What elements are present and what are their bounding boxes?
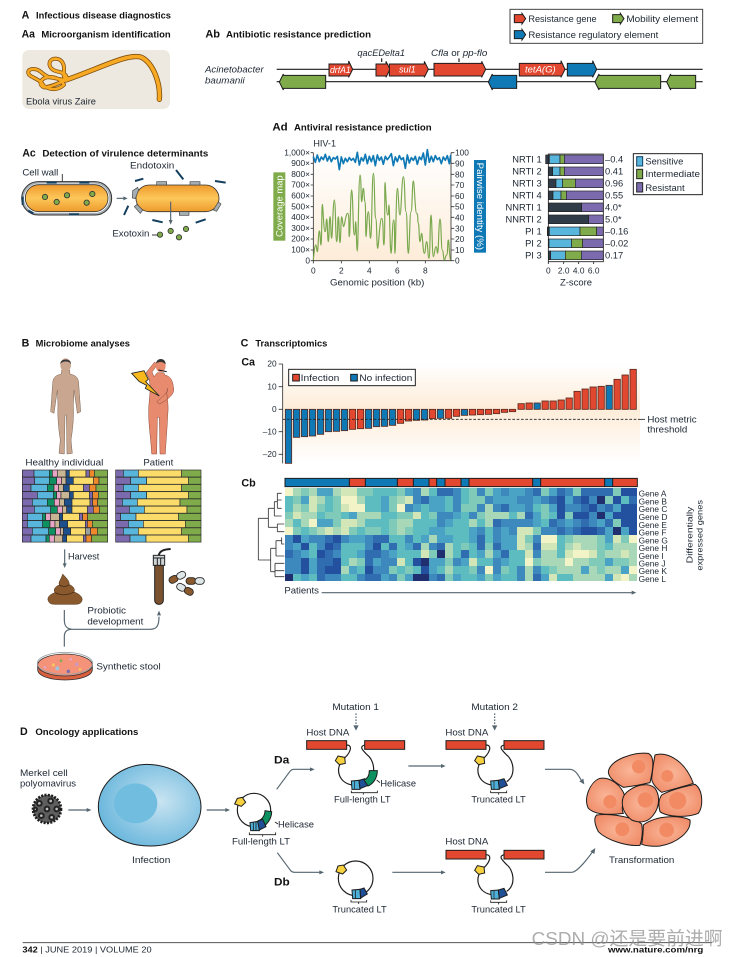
harvest arrow: Harvest xyxy=(68,552,100,562)
score values: 5.0* xyxy=(605,215,622,225)
score values: 0.41 xyxy=(605,167,623,177)
y axis: 10 xyxy=(267,381,277,391)
heading C: Transcriptomics xyxy=(255,339,327,349)
left axis labels: 1,000× xyxy=(284,147,310,157)
panel: C transcriptomics xyxy=(241,338,705,595)
gene labels above: qacEDelta1 xyxy=(357,48,405,58)
labels healthy individual and patient: Healthy individual xyxy=(25,458,103,468)
score values: –0.02 xyxy=(605,239,628,249)
watermark: CSDN @还是要前进啊 xyxy=(532,928,723,949)
gene labels: Gene E xyxy=(639,520,667,530)
differentially expressed genes label xyxy=(685,500,705,571)
mutation 2 label and arrow xyxy=(471,702,518,731)
left axis labels: 0 xyxy=(305,255,310,265)
heading Ad: Antiviral resistance prediction xyxy=(294,123,432,133)
gene labels: Gene K xyxy=(639,566,667,576)
drug class labels: PI 1 xyxy=(525,227,542,237)
truncated LT label top: Truncated LT xyxy=(471,795,526,805)
legend: resistance categories: Intermediate xyxy=(645,169,700,179)
gene names in arrows: drfA1 xyxy=(330,65,351,75)
gene arrows xyxy=(279,61,696,90)
label Ebola virus Zaire: Ebola virus Zaire xyxy=(26,96,96,106)
gene names in arrows: tetA(G) xyxy=(525,64,556,74)
legend: gene types xyxy=(510,9,703,43)
z-score axis labels xyxy=(546,265,600,275)
label transformation: Transformation xyxy=(609,855,674,865)
drug class labels: PI 2 xyxy=(525,239,542,249)
threshold line and label: threshold xyxy=(647,425,687,435)
icon: patient xyxy=(146,359,174,454)
label infection: Infection xyxy=(132,855,170,865)
labels helicase and full-length LT Da: Helicase xyxy=(380,779,416,789)
label Merkel cell polyomavirus xyxy=(20,768,76,789)
resistance score bars xyxy=(546,154,603,264)
icon: capsules xyxy=(168,570,204,597)
icon: healthy person xyxy=(51,358,81,454)
gene labels: Gene C xyxy=(639,504,667,514)
right axis labels: 30 xyxy=(455,223,465,233)
label cell wall xyxy=(22,168,62,182)
x axis labels: 4 xyxy=(367,265,372,275)
score values: 0.55 xyxy=(605,191,623,201)
label Merkel cell polyomavirus: polyomavirus xyxy=(20,779,76,789)
truncated LT label bottom: Truncated LT xyxy=(471,905,526,915)
mutation 1 label and arrow: Mutation 1 xyxy=(332,702,379,712)
gene labels: Gene F xyxy=(639,528,666,538)
right axis labels: 20 xyxy=(455,234,465,244)
heading C: C xyxy=(241,338,249,350)
sub heading Cb: Cb xyxy=(241,477,256,489)
intact bacterial cell xyxy=(22,182,112,215)
probiotic development connector arrow xyxy=(64,610,161,647)
drug class labels: PI 3 xyxy=(525,251,542,261)
heatmap xyxy=(285,488,637,581)
score values: 4.0* xyxy=(605,203,622,213)
legend: resistance categories: Resistant xyxy=(645,183,685,193)
label HIV-1: HIV-1 xyxy=(313,139,336,149)
legend: gene types: Resistance gene xyxy=(528,14,597,24)
mutation 2 label and arrow: Mutation 2 xyxy=(471,702,518,712)
coverage chart xyxy=(311,150,454,263)
y axis: 20 xyxy=(267,359,277,369)
drug class labels: NRTI 1 xyxy=(512,155,542,165)
waterfall bar chart xyxy=(285,369,636,463)
right axis labels: 80 xyxy=(455,169,465,179)
icon: petri dish xyxy=(37,652,93,680)
icon: pain lightning bolt xyxy=(132,371,159,396)
dendrogram xyxy=(258,493,284,577)
drug class labels: NNRTI 2 xyxy=(506,215,542,225)
x axis labels: 0 xyxy=(311,265,316,275)
arrow cell to plasmid xyxy=(207,808,230,812)
heading Ab: Antibiotic resistance prediction xyxy=(226,30,371,40)
label synthetic stool: Synthetic stool xyxy=(96,662,161,672)
heading Ac: Detection of virulence determinants xyxy=(42,149,208,159)
legend: gene types: Resistance regulatory element xyxy=(528,30,659,40)
gene labels xyxy=(639,489,668,584)
chart background xyxy=(283,364,640,463)
panel: Ac detection of virulence determinants xyxy=(22,148,226,240)
right axis labels: 100 xyxy=(455,148,469,158)
panel: Ad antiviral resistance prediction xyxy=(272,121,702,288)
arrow virus to cell xyxy=(68,808,91,812)
score values: –0.4 xyxy=(605,155,623,165)
arrow to lysed cell xyxy=(117,196,128,200)
drug class labels: NRTI 2 xyxy=(512,167,542,177)
gene labels: Gene L xyxy=(639,574,666,584)
patients axis arrow: Patients xyxy=(284,585,319,595)
heading D: Oncology applications xyxy=(35,727,138,737)
section title A: Infectious disease diagnostics xyxy=(36,11,171,21)
label cell wall: Cell wall xyxy=(22,168,58,178)
icon: Ebola virus xyxy=(28,56,159,99)
gene labels: Gene B xyxy=(639,497,667,507)
arrow to Db xyxy=(277,853,324,874)
left axis labels: 100× xyxy=(291,245,310,255)
panel: B microbiome analyses xyxy=(22,338,204,680)
truncated LT label Db: Truncated LT xyxy=(332,905,387,915)
differentially expressed genes label: expressed genes xyxy=(695,500,705,571)
labels Da and Db xyxy=(274,754,290,888)
left axis labels: 700× xyxy=(291,180,310,190)
label endotoxin: Endotoxin xyxy=(130,160,174,170)
legend: resistance categories xyxy=(633,154,702,195)
label probiotic development: development xyxy=(87,617,144,627)
gene labels above: Cfla or pp-flo xyxy=(431,48,487,58)
label Merkel cell polyomavirus: Merkel cell xyxy=(20,768,68,778)
left axis labels xyxy=(284,147,310,265)
left axis labels: 400× xyxy=(291,212,310,222)
legend: infection xyxy=(289,369,415,386)
right axis labels: 60 xyxy=(455,191,465,201)
arrow exotoxin release xyxy=(169,202,173,225)
gene tracks xyxy=(277,58,703,82)
score values: –0.16 xyxy=(605,227,628,237)
drug class labels: NNRTI 1 xyxy=(506,203,542,213)
right axis labels: 0 xyxy=(455,256,460,266)
host DNA label Da: Host DNA xyxy=(306,728,350,738)
heading Ad: Ad xyxy=(272,121,288,133)
panel: Ab antibiotic resistance prediction xyxy=(204,29,703,90)
labels healthy individual and patient xyxy=(25,458,174,468)
legend: infection: No infection xyxy=(359,373,412,383)
right axis labels: 50 xyxy=(455,202,465,212)
labels helicase and full-length LT: Helicase xyxy=(278,820,314,830)
stacked bars: patient xyxy=(116,470,201,542)
labels helicase and full-length LT Da: Full-length LT xyxy=(334,795,391,805)
label probiotic development: Probiotic xyxy=(87,606,126,616)
integrated plasmid with helicase xyxy=(307,741,405,795)
left axis labels: 900× xyxy=(291,158,310,168)
x axis labels xyxy=(311,265,428,275)
labels helicase and full-length LT xyxy=(232,820,314,847)
species label: baumanii xyxy=(205,76,246,86)
threshold line and label xyxy=(283,415,697,435)
left axis labels: 300× xyxy=(291,223,310,233)
x axis title: Genomic position (kb) xyxy=(330,278,424,288)
heading Ad xyxy=(272,121,432,133)
mutation 1 label and arrow xyxy=(332,702,379,731)
stacked bars: healthy individual xyxy=(22,470,108,542)
panel: Aa microorganism identification xyxy=(22,29,171,109)
full-length plasmid xyxy=(235,793,278,837)
z-score axis labels: 0 xyxy=(546,265,551,275)
gene labels above xyxy=(357,48,487,58)
right axis labels xyxy=(455,148,469,266)
heading B: Microbiome analyses xyxy=(36,339,130,349)
heading Ab: Ab xyxy=(205,29,220,41)
threshold line and label: Host metric xyxy=(647,415,697,425)
heading D: D xyxy=(20,726,28,738)
footer right: www.nature.com/nrg xyxy=(607,946,703,955)
gene names in arrows xyxy=(330,64,556,75)
right axis labels: 40 xyxy=(455,212,465,222)
integrated truncated plasmid top xyxy=(446,741,544,795)
y axis xyxy=(263,359,283,463)
arrow to Da xyxy=(277,767,315,789)
heading Aa: Aa xyxy=(22,29,35,41)
z-score axis labels: 2.0 xyxy=(558,265,570,275)
footer left: 342 | JUNE 2019 | VOLUME 20 xyxy=(22,946,152,955)
differentially expressed genes label: Differentially xyxy=(685,506,695,563)
labels helicase and full-length LT Da xyxy=(334,779,416,805)
score values: 0.17 xyxy=(605,251,623,261)
patients axis arrow xyxy=(284,585,636,595)
gene labels: Gene D xyxy=(639,512,667,522)
icon: stool xyxy=(48,574,82,604)
gene labels: Gene H xyxy=(639,543,667,553)
coverage map axis title: Coverage map xyxy=(274,175,284,237)
truncated plasmid Db xyxy=(336,861,373,904)
y axis: 0 xyxy=(272,404,277,414)
labels healthy individual and patient: Patient xyxy=(143,458,174,468)
score values: 0.96 xyxy=(605,179,623,189)
gene labels: Gene J xyxy=(639,559,666,569)
panel: D oncology applications xyxy=(20,702,702,915)
drug class labels: NRTI 3 xyxy=(512,179,542,189)
z-score axis title: Z-score xyxy=(560,278,592,288)
gene labels: Gene I xyxy=(639,551,664,561)
left axis labels: 500× xyxy=(291,201,310,211)
heading Ac: Ac xyxy=(22,148,36,160)
drug class labels xyxy=(506,155,542,261)
labels Da and Db: Db xyxy=(274,876,290,888)
right axis labels: 70 xyxy=(455,180,465,190)
y axis: –20 xyxy=(263,449,277,459)
label probiotic development xyxy=(87,606,144,627)
host DNA label top: Host DNA xyxy=(445,728,489,738)
integrated truncated plasmid bottom xyxy=(446,850,544,904)
species label xyxy=(204,65,265,86)
heading C xyxy=(241,338,327,350)
drug class labels: NRTI 4 xyxy=(512,191,542,201)
species label: Acinetobacter xyxy=(204,65,265,75)
transformed tumour cell cluster xyxy=(587,753,702,846)
gene labels: Gene A xyxy=(639,489,667,499)
gene labels: Gene G xyxy=(639,535,668,545)
left axis labels: 600× xyxy=(291,191,310,201)
icon: polyomavirus xyxy=(33,795,61,823)
left axis labels: 800× xyxy=(291,169,310,179)
x axis labels: 2 xyxy=(339,265,344,275)
host DNA label bottom: Host DNA xyxy=(445,837,489,847)
heading Aa: Microorganism identification xyxy=(41,30,171,40)
y axis: –10 xyxy=(263,426,277,436)
exotoxin label and particles: Exotoxin xyxy=(112,229,149,239)
x axis labels: 6 xyxy=(395,265,400,275)
infection status strip xyxy=(285,478,637,487)
z-score axis labels: 4.0 xyxy=(573,265,585,275)
arrow Da to mutation 2 xyxy=(408,764,446,768)
right axis labels: 90 xyxy=(455,158,465,168)
legend: infection: Infection xyxy=(301,373,339,383)
gene names in arrows: sul1 xyxy=(399,64,416,74)
footer rule xyxy=(23,941,712,944)
infected host cell xyxy=(98,764,201,846)
heading B: B xyxy=(22,338,30,350)
x axis labels: 8 xyxy=(423,265,428,275)
right axis labels: 10 xyxy=(455,245,465,255)
section title A: A xyxy=(22,10,30,22)
harvest arrow xyxy=(63,549,100,568)
labels helicase and full-length LT: Full-length LT xyxy=(232,837,290,847)
labels Da and Db: Da xyxy=(274,754,289,766)
icon: probiotic tube xyxy=(153,549,171,604)
legend: gene types: Mobility element xyxy=(626,14,699,24)
sub heading Ca: Ca xyxy=(241,357,255,369)
legend: resistance categories: Sensitive xyxy=(645,157,683,167)
lysed bacterial cell xyxy=(124,170,226,223)
left axis labels: 200× xyxy=(291,234,310,244)
arrows to transformation xyxy=(545,769,595,872)
image panel background xyxy=(22,50,170,109)
score values xyxy=(605,155,628,261)
exotoxin label and particles xyxy=(112,226,189,240)
z-score axis labels: 6.0 xyxy=(588,265,600,275)
arrow Db to integration xyxy=(392,870,446,874)
pairwise identity axis title: Pairwise identity (%) xyxy=(475,163,485,250)
